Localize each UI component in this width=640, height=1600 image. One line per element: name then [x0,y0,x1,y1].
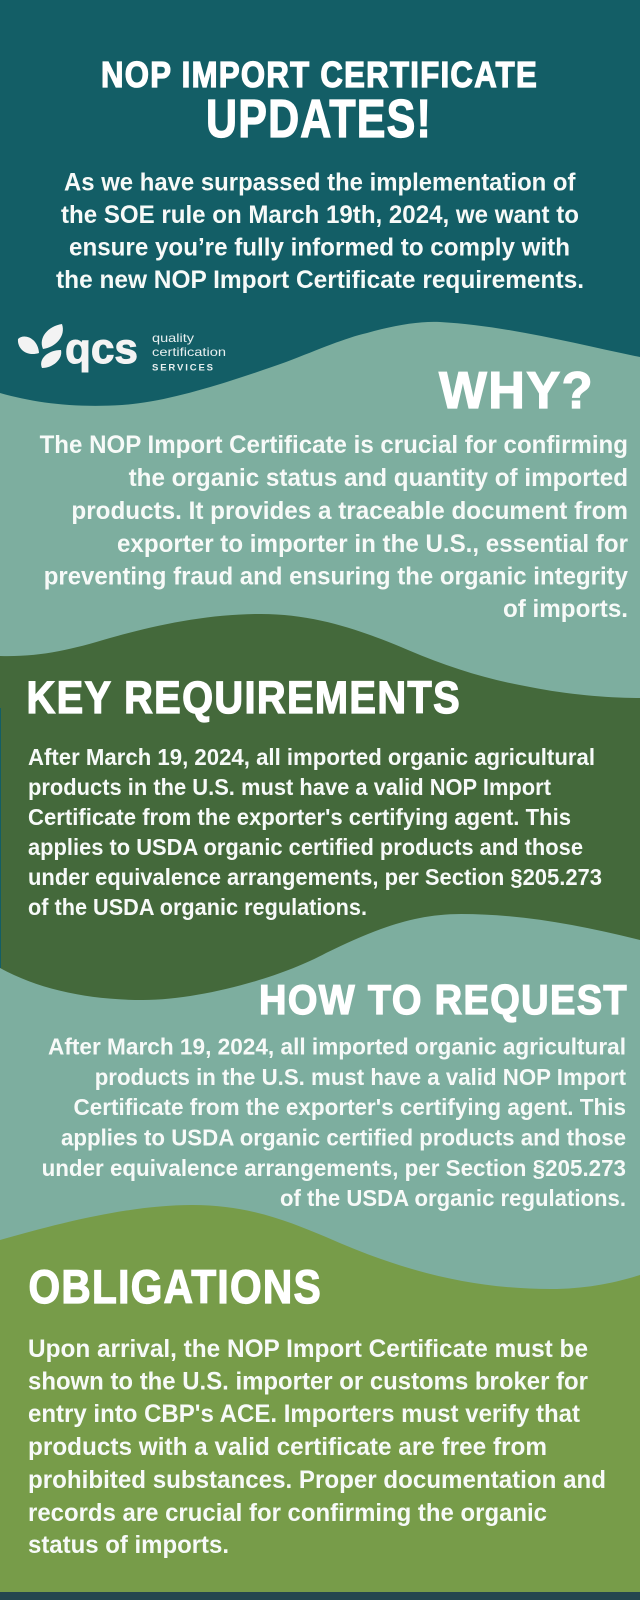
logo tagline [152,331,226,374]
intro text: ensure you’re fully informed to comply with [69,234,570,262]
text: key requirements: products in the U.S. must have a valid NOP Import [28,774,551,800]
heading: why: WHY? [439,362,594,420]
panel: key requirements [0,614,640,1000]
heading: obligations: OBLIGATIONS [28,1260,322,1313]
text: how to request: products in the U.S. must have a valid NOP Import [95,1064,626,1090]
panel: how to request [42,976,628,1211]
text: obligations: entry into CBP's ACE. Importers must verify that [28,1400,581,1428]
intro text: As we have surpassed the implementation of [64,168,576,196]
text: how to request: After March 19, 2024, all imported organic agricultural [48,1034,626,1060]
text: why: preventing fraud and ensuring the organic integrity [44,562,628,590]
text: obligations: status of imports. [28,1531,229,1559]
logo tagline: SERVICES [152,362,213,374]
text: how to request: of the USDA organic regulations. [280,1185,626,1211]
text: key requirements: of the USDA organic regulations. [28,894,367,920]
text: key requirements: under equivalence arrangements, per Section §205.273 [28,864,602,890]
text: obligations: shown to the U.S. importer or customs broker for [28,1368,588,1396]
icon: leaves [18,324,63,368]
logo tagline: quality [152,331,194,345]
text: obligations: records are crucial for confirming the organic [28,1499,547,1527]
text: how to request: Certificate from the exporter's certifying agent. This [74,1094,626,1120]
text: why: of imports. [503,595,628,623]
text: obligations [28,1335,606,1559]
text: why: exporter to importer in the U.S., essential for [117,530,628,558]
title: UPDATES! [206,89,432,149]
text: key requirements: After March 19, 2024, all imported organic agricultural [28,744,595,770]
text: how to request: under equivalence arrangements, per Section §205.273 [42,1155,626,1181]
logo wordmark: qcs [65,325,138,373]
intro text: the new NOP Import Certificate requirements. [56,266,584,294]
text: obligations: products with a valid certificate are free from [28,1433,547,1461]
text: why [40,431,628,623]
text: obligations: Upon arrival, the NOP Import Certificate must be [28,1335,588,1363]
footer bar [0,1592,640,1600]
panel: why [0,322,640,700]
heading: key requirements: KEY REQUIREMENTS [26,672,461,723]
intro text: the SOE rule on March 19th, 2024, we want to [61,201,579,229]
logo: qcs [18,324,226,374]
logo tagline: certification [152,345,226,359]
panel: obligations [0,1205,640,1592]
text: why: the organic status and quantity of imported [129,464,628,492]
panel: header [0,0,640,410]
text: key requirements: applies to USDA organic certified products and those [28,834,583,860]
text: obligations: prohibited substances. Proper documentation and [28,1466,606,1494]
text: key requirements: Certificate from the exporter's certifying agent. This [28,804,571,830]
title: NOP IMPORT CERTIFICATE [101,54,538,95]
text: how to request [42,1034,626,1211]
text: why: The NOP Import Certificate is crucial for confirming [40,431,628,459]
text: how to request: applies to USDA organic certified products and those [61,1124,626,1150]
title [101,54,538,149]
text: key requirements [28,744,602,920]
text: why: products. It provides a traceable document from [71,497,628,525]
intro text [56,168,584,294]
